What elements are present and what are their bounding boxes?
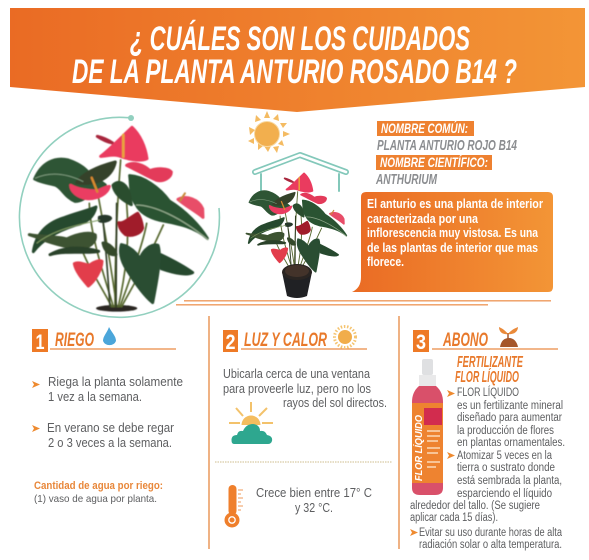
fertilizer instructions: alrededor del tallo. (Se sugiere [410,500,540,512]
icon: sprout [499,327,518,347]
heading: abono: 3 [416,331,426,354]
fertilizer instructions: FLOR LÍQUIDO [457,386,519,399]
icon: sun [248,111,290,153]
callout: description: caracterizada por una [367,212,479,226]
panel: riego [32,327,183,505]
bullet: summer: En verano se debe regar [47,421,174,435]
icon: thermometer [224,485,243,528]
panel: luz y calor [215,326,392,528]
bullet: frequency: 1 vez a la semana. [48,390,142,404]
callout: description: El anturio es una planta de interior [367,197,543,211]
light text: para proveerle luz, pero no los [223,382,371,396]
icon: sun and cloud [229,402,273,444]
fertilizer instructions: Atomizar 5 veces en la [457,450,552,462]
light text: Ubicarla cerca de una ventana [223,367,370,381]
heading: abono [413,330,558,354]
icon: fertilizer bottle [412,359,443,495]
icon: house outline [255,155,346,191]
temperature text [256,486,372,515]
icon: fertilizer bottle: FLOR LÍQUIDO [412,415,425,481]
callout: description: de las plantas de interior que mas [367,241,538,255]
fertilizer instructions: en plantas ornamentales. [457,437,565,449]
callout: description: florece. [367,255,404,269]
common name: PLANTA ANTURIO ROJO B14 [377,137,517,154]
temperature text: Crece bien entre 17° C [256,486,372,500]
title [72,20,517,91]
panel: abono [410,327,565,551]
potted plant [246,173,347,298]
water quantity note [34,480,163,505]
fertilizer instructions: diseñado para aumentar [457,412,562,424]
light text: rayos del sol directos. [283,396,387,410]
fertilizer instructions: aplicar cada 15 días). [410,512,498,524]
product heading: FERTILIZANTE [457,354,523,371]
scientific name: ANTHURIUM [375,171,437,188]
water quantity note: (1) vaso de agua por planta. [34,493,157,505]
fertilizer instructions: la producción de flores [457,425,554,437]
heading: luz y calor: LUZ Y CALOR [244,330,327,351]
icon: anthurium plant [29,127,208,312]
fertilizer instructions [410,386,565,551]
fertilizer instructions: tierra o sustrato donde [457,462,555,474]
light text [223,367,387,410]
icon: small sun [334,326,356,348]
scientific name: NOMBRE CIENTÍFICO: [380,155,488,170]
water quantity note: Cantidad de agua por riego: [34,480,163,492]
product heading: FLOR LÍQUIDO [455,369,519,386]
icon: water drop [103,327,116,345]
heading: riego [32,329,176,354]
icon: pot [282,264,312,298]
heading: riego: 1 [36,331,45,354]
fertilizer instructions: está sembrada la planta, [457,475,562,487]
circular plant illustration [19,115,219,317]
callout: description [352,192,553,292]
heading: abono: ABONO [442,330,488,351]
bullet: summer [32,421,174,450]
fertilizer instructions: esparciendo el líquido [457,488,552,500]
callout: description: inflorescencia muy vistosa. Es una [367,226,539,240]
fertilizer instructions: es un fertilizante mineral [457,400,563,412]
product heading [455,354,523,386]
bullet: summer: 2 o 3 veces a la semana. [48,436,172,450]
common name [377,121,517,154]
temperature text: y 32 °C. [295,501,333,515]
bullet: frequency: Riega la planta solamente [48,375,183,389]
common name: NOMBRE COMÚN: [381,121,468,136]
title banner [10,8,585,112]
bullet: frequency [32,375,183,404]
heading: luz y calor: 2 [226,331,236,354]
scientific name [375,155,492,188]
icon: small plant [246,173,347,277]
heading: riego: RIEGO [55,330,94,351]
fertilizer instructions: radiación solar o alta temperatura. [419,539,562,551]
